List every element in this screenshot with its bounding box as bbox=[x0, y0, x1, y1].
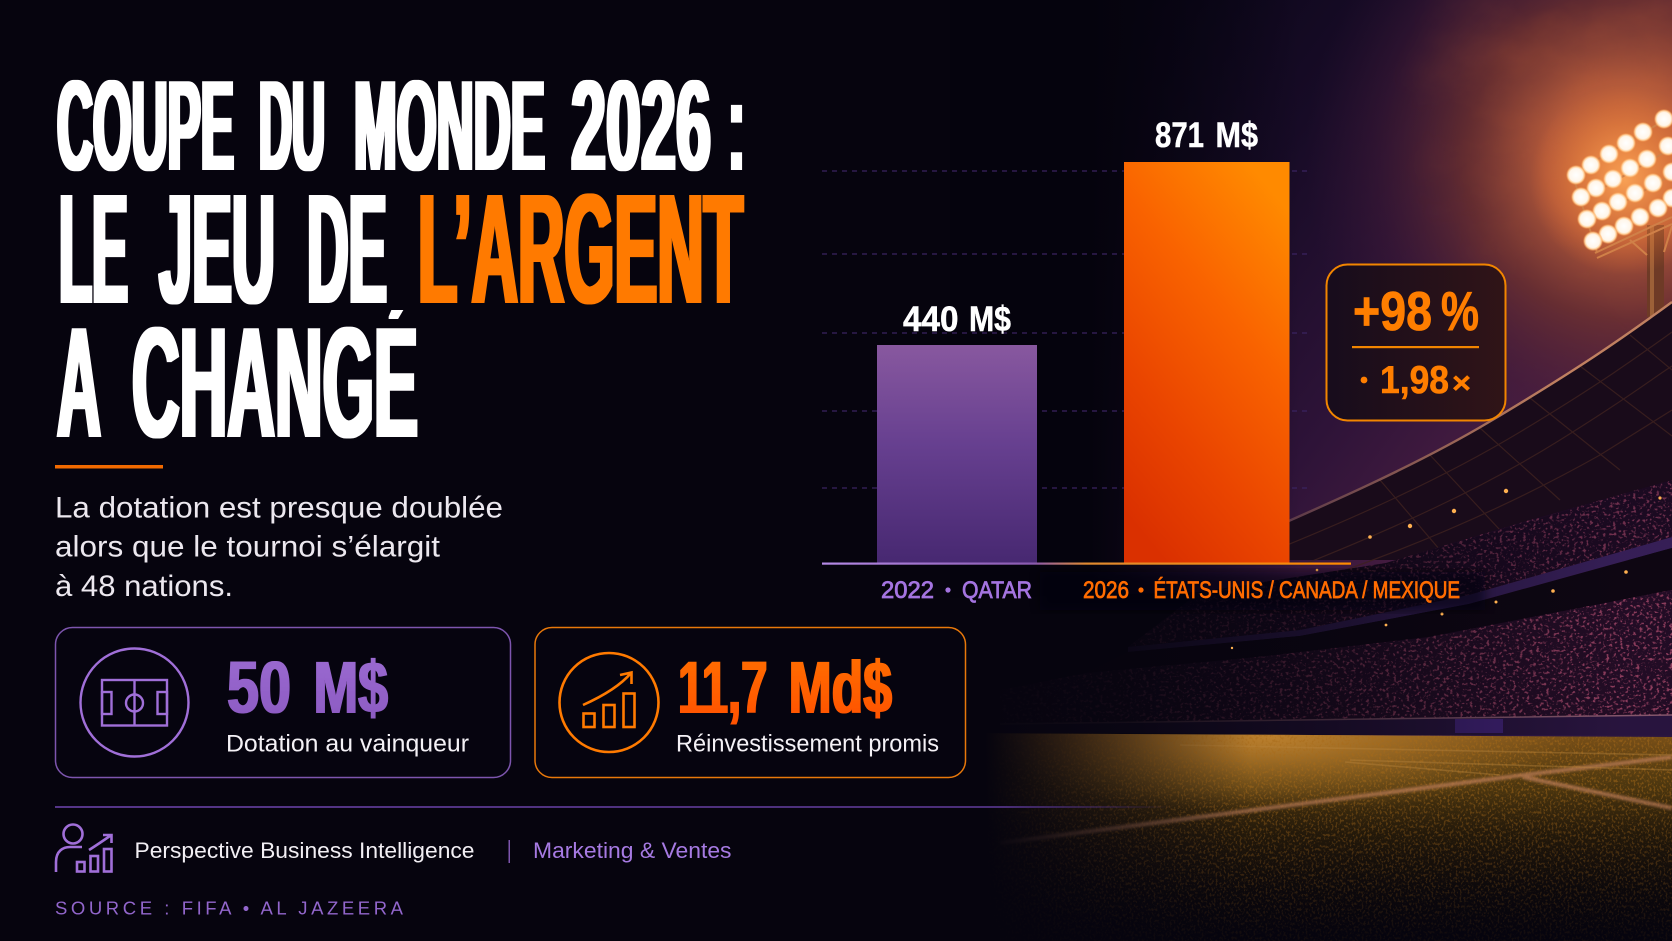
title: DU bbox=[259, 54, 325, 198]
pitch fade bbox=[930, 733, 1255, 941]
callout: growth bbox=[1326, 264, 1506, 420]
lower crowd bbox=[1000, 590, 1672, 724]
value: 1,98x bbox=[1361, 359, 1471, 402]
label: 2026: ÉTATS-UNIS / CANADA / MEXIQUE bbox=[1154, 577, 1460, 604]
title bbox=[56, 80, 744, 438]
value: +98 %: +98 bbox=[1353, 280, 1432, 342]
advertising boards bbox=[1000, 715, 1672, 738]
value: 440 M$: 440 bbox=[903, 300, 958, 339]
bar chart bbox=[822, 116, 1485, 610]
stand roof bbox=[1290, 301, 1672, 569]
title rule bbox=[55, 465, 163, 468]
value: 871 M$ bbox=[1155, 116, 1258, 155]
value: 1,98x: × bbox=[1452, 367, 1471, 400]
value: 871 M$: 871 bbox=[1155, 116, 1204, 155]
value: 1,98x: 1,98 bbox=[1380, 359, 1449, 402]
title: CHANGÉ bbox=[132, 295, 418, 471]
value: 440 M$: M$ bbox=[969, 300, 1011, 339]
icon: analyst with chart bbox=[56, 824, 112, 872]
value: +98 %: % bbox=[1441, 280, 1479, 342]
value: 871 M$: M$ bbox=[1216, 116, 1258, 155]
label: 2026: 2026 bbox=[1083, 577, 1129, 604]
title: JEU bbox=[159, 162, 275, 337]
value: 50 bbox=[227, 646, 291, 729]
value: Md$ bbox=[789, 646, 892, 729]
background: stadium photo bbox=[1000, 0, 1672, 941]
text: L’ARGENT bbox=[418, 162, 743, 337]
title: DE bbox=[307, 162, 387, 337]
bar: 2022 bbox=[877, 345, 1037, 563]
value bbox=[678, 646, 892, 729]
stadium lights bbox=[1231, 489, 1662, 649]
footer: brand: Perspective Business Intelligence bbox=[134, 838, 475, 863]
footer: source: SOURCE : FIFA • AL JAZEERA bbox=[55, 898, 404, 918]
card: reinvestment bbox=[535, 628, 966, 778]
bar: 2026 bbox=[1124, 162, 1290, 563]
footer divider bbox=[55, 806, 1172, 808]
label band bbox=[1040, 572, 1485, 610]
label: Réinvestissement promis bbox=[676, 730, 939, 758]
footer: separator bbox=[508, 840, 510, 863]
floodlight bbox=[1530, 85, 1672, 317]
title: 2026 bbox=[571, 54, 711, 198]
title: COUPE bbox=[57, 54, 234, 198]
icon: rising bars bbox=[560, 653, 658, 752]
label: 2022: QATAR bbox=[962, 577, 1032, 604]
value: 440 M$ bbox=[903, 300, 1011, 339]
label: 2022 bbox=[881, 577, 1032, 604]
title: A bbox=[57, 295, 101, 471]
value: M$ bbox=[314, 646, 388, 729]
crowd fade bbox=[900, 480, 1672, 735]
axis bbox=[822, 562, 1351, 565]
card: winner prize bbox=[56, 628, 510, 778]
label: 2026 bbox=[1083, 577, 1460, 604]
label: Dotation au vainqueur bbox=[226, 730, 469, 758]
label: 2022: 2022 bbox=[881, 577, 934, 604]
subtitle: La dotation est presque doublée bbox=[55, 492, 503, 524]
value: 11,7 bbox=[678, 646, 768, 729]
upper crowd bbox=[1128, 480, 1672, 647]
subtitle: à 48 nations. bbox=[55, 570, 233, 603]
tier band bbox=[1128, 537, 1672, 652]
mid tier dark strip bbox=[1086, 548, 1672, 673]
subtitle bbox=[55, 492, 503, 603]
sky glow bbox=[1000, 0, 1672, 600]
value bbox=[227, 646, 388, 729]
text: : bbox=[728, 54, 745, 198]
footer: category: Marketing & Ventes bbox=[533, 838, 732, 863]
title: MONDE bbox=[354, 54, 545, 198]
icon: football pitch bbox=[80, 648, 188, 756]
pitch bbox=[940, 733, 1672, 941]
subtitle: alors que le tournoi s’élargit bbox=[55, 530, 440, 564]
title: LE bbox=[59, 162, 128, 337]
